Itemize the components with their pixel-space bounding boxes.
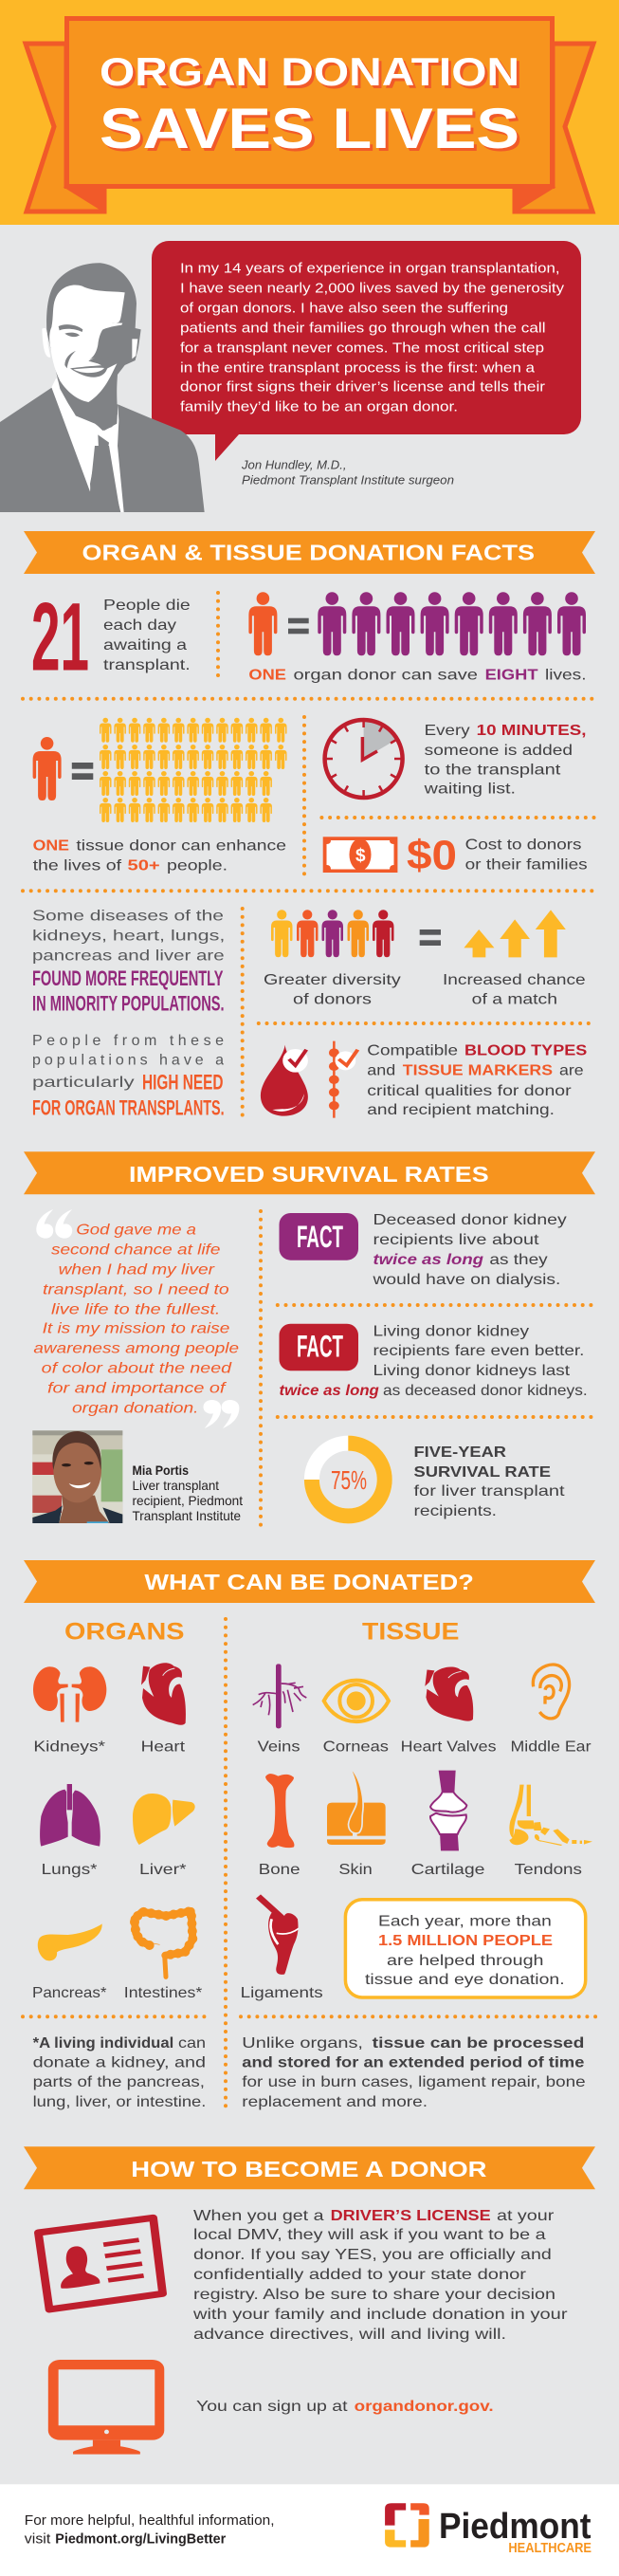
- text: five-year survival rate: [413, 1444, 565, 1519]
- stat: 21 people die each day: each day: [103, 617, 176, 634]
- patient quote: live life to the fullest.: [51, 1302, 220, 1318]
- text: five-year survival rate: SURVIVAL RATE: [413, 1464, 551, 1481]
- text: diseases in minority populations: pancreas and liver are: [32, 948, 225, 965]
- text: living donor footnote: donate a kidney, and: [33, 2054, 206, 2070]
- text: living donor fact: as deceased donor kidneys.: [383, 1383, 588, 1399]
- text: diseases in minority populations: kidneys, heart, lungs,: [32, 929, 225, 945]
- pictogram: one tissue donor equals fifty people: people.: [167, 858, 228, 874]
- text: tissue storage note: Unlike organs,: [242, 2035, 363, 2052]
- footer text: [25, 2512, 275, 2548]
- text: diseases in minority populations: HIGH NEED: [142, 1071, 224, 1095]
- logo: Piedmont Healthcare: [385, 2503, 592, 2556]
- organ and tissue labels: Bone: [259, 1862, 300, 1878]
- icon: tendons foot: [509, 1785, 592, 1846]
- text: driver's license registration: local DMV, they will ask if you want to be a: [193, 2227, 546, 2243]
- logo: Piedmont Healthcare: HEALTHCARE: [508, 2541, 592, 2556]
- callout: 1.5 million people: are helped through: [387, 1953, 544, 1969]
- icon: kidneys: [33, 1666, 106, 1722]
- pictogram: one organ donor equals eight lives: organ donor can save: [294, 668, 478, 684]
- callout: 1.5 million people: Each year, more than: [378, 1914, 552, 1930]
- footer text: Piedmont.org/LivingBetter: [55, 2531, 226, 2548]
- text: driver's license registration: confidentially added to your state donor: [193, 2267, 527, 2283]
- patient quote: of color about the need: [42, 1361, 232, 1377]
- text: living donor fact: Living donor kidney: [373, 1323, 529, 1339]
- organ and tissue labels: [32, 1739, 592, 2001]
- attribution: Jon Hundley: Jon Hundley, M.D.,: [241, 457, 347, 472]
- title: SAVES LIVES: [100, 97, 519, 160]
- text: driver's license registration: [192, 2208, 568, 2343]
- stat: zero dollar cost: or their families: [465, 857, 588, 874]
- stat: zero dollar cost: [407, 833, 588, 879]
- pictogram: increased chance of a match: [443, 910, 586, 1007]
- heading: organs: ORGANS: [64, 1619, 184, 1646]
- pictogram: one organ donor equals eight lives: EIGHT: [485, 668, 538, 684]
- icon: bone: [265, 1774, 294, 1848]
- caption: Mia Portis: [133, 1463, 243, 1523]
- icon: veins: [253, 1664, 306, 1728]
- organ and tissue labels: Veins: [258, 1739, 300, 1756]
- text: blood types and tissue markers: and recipient matching.: [367, 1102, 555, 1118]
- patient quote: awareness among people: [33, 1341, 239, 1357]
- text: tissue storage note: and stored for an extended period of time: [242, 2054, 585, 2070]
- text: deceased donor fact: would have on dialysis.: [372, 1272, 560, 1288]
- text: diseases in minority populations: IN MINORITY POPULATIONS.: [32, 992, 225, 1016]
- speech bubble: surgeon quote: donor first signs their driver’s license and tells their: [180, 379, 545, 395]
- patient quote: [33, 1223, 239, 1417]
- pictogram: greater diversity of donors: [264, 910, 401, 1007]
- icon: ligaments knee: [256, 1894, 299, 1975]
- attribution: Jon Hundley: Piedmont Transplant Institute surgeon: [242, 472, 454, 488]
- text: living donor fact: twice as long: [279, 1383, 379, 1399]
- text: diseases in minority populations: populations have a: [32, 1053, 224, 1069]
- section banner: how to become a donor: [24, 2146, 595, 2189]
- pictogram: increased chance of a match: of a match: [472, 991, 557, 1007]
- text: living donor fact: [279, 1323, 588, 1399]
- text: living donor footnote: lung, liver, or intestine.: [33, 2094, 206, 2110]
- caption: Mia Portis: Liver transplant: [133, 1478, 219, 1493]
- text: diseases in minority populations: FOUND MORE FREQUENTLY: [32, 966, 224, 990]
- stat: 21 people die each day: awaiting a: [103, 637, 187, 653]
- text: driver's license registration: donor. If you say YES, you are officially and: [193, 2247, 552, 2263]
- heading: tissue: TISSUE: [362, 1619, 459, 1646]
- text: every 10 minutes: someone is added: [425, 743, 573, 759]
- footer text: visit: [25, 2531, 51, 2548]
- text: blood types and tissue markers: Compatible: [367, 1043, 458, 1059]
- title: SAVES LIVES: [102, 100, 522, 163]
- pictogram: one organ donor equals eight lives: lives.: [545, 668, 586, 684]
- caption: Mia Portis: recipient, Piedmont: [133, 1493, 243, 1508]
- section banner: improved survival rates: [24, 1151, 595, 1194]
- caption: Mia Portis: Mia Portis: [133, 1463, 189, 1478]
- stat: 21 people die each day: 21: [31, 583, 89, 691]
- icon: closing quote mark: [203, 1400, 239, 1428]
- text: driver's license registration: registry. Also be sure to share your decision: [193, 2287, 555, 2303]
- text: every 10 minutes: to the transplant: [425, 763, 561, 779]
- icon: intestines: [135, 1911, 192, 1977]
- section banner: how to become a donor: HOW TO BECOME A DONOR: [131, 2157, 487, 2181]
- logo: Piedmont Healthcare: Piedmont: [439, 2507, 592, 2547]
- title: ORGAN DONATION: [102, 52, 522, 97]
- icon: pancreas: [38, 1923, 102, 1960]
- stat: 21 people die each day: People die: [103, 598, 191, 614]
- text: every 10 minutes: 10 MINUTES,: [477, 723, 586, 739]
- text: living donor footnote: can: [178, 2035, 206, 2052]
- text: living donor footnote: [33, 2035, 206, 2110]
- text: tissue storage note: tissue can be processed: [373, 2035, 584, 2052]
- text: blood types and tissue markers: and: [367, 1063, 395, 1079]
- attribution: Jon Hundley: [241, 457, 454, 488]
- text: every 10 minutes: waiting list.: [423, 782, 516, 798]
- organ and tissue labels: Ligaments: [241, 1985, 323, 2001]
- speech bubble: surgeon quote: in the entire transplant process is the first: when a: [180, 360, 536, 376]
- organ and tissue labels: Cartilage: [411, 1862, 485, 1878]
- portrait: surgeon illustration: [0, 263, 205, 512]
- patient quote: when I had my liver: [59, 1262, 215, 1279]
- chart: 75 percent donut: 75%: [331, 1465, 367, 1495]
- organ and tissue labels: Heart Valves: [401, 1739, 497, 1756]
- icon: clock: [325, 720, 403, 798]
- badge: fact purple: [279, 1213, 358, 1260]
- organ and tissue labels: Heart: [141, 1739, 186, 1756]
- text: diseases in minority populations: [32, 909, 225, 1120]
- text: sign up online: [196, 2399, 494, 2415]
- section banner: organ and tissue donation facts: ORGAN & TISSUE DONATION FACTS: [82, 541, 535, 565]
- pictogram: one tissue donor equals fifty people: the lives of: [33, 858, 122, 874]
- icon: cartilage joint: [430, 1771, 466, 1850]
- organ and tissue labels: Pancreas*: [32, 1985, 106, 2001]
- organ and tissue labels: Lungs*: [42, 1862, 97, 1878]
- title: ORGAN DONATION: [100, 49, 519, 94]
- badge: fact red: [279, 1324, 358, 1371]
- text: deceased donor fact: Deceased donor kidney: [373, 1212, 567, 1228]
- speech bubble: surgeon quote: for a transplant never comes. The most critical step: [180, 341, 544, 357]
- badge: fact red: FACT: [297, 1330, 343, 1364]
- pictogram: one tissue donor equals fifty people: ONE: [33, 838, 69, 855]
- pictogram: one organ donor equals eight lives: [248, 592, 586, 684]
- text: sign up online: You can sign up at: [196, 2399, 348, 2415]
- organ and tissue labels: Skin: [338, 1862, 373, 1878]
- icon: equals: [420, 929, 441, 946]
- callout: 1.5 million people: 1.5 MILLION PEOPLE: [378, 1933, 553, 1949]
- title: [100, 49, 522, 163]
- text: every 10 minutes: [423, 723, 586, 798]
- icon: liver: [133, 1794, 195, 1845]
- header band: [0, 0, 619, 225]
- organ and tissue labels: Liver*: [139, 1862, 187, 1878]
- stat: zero dollar cost: Cost to donors: [465, 837, 582, 854]
- text: driver's license registration: DRIVER’S LICENSE: [331, 2208, 491, 2224]
- text: blood types and tissue markers: [367, 1043, 588, 1118]
- text: deceased donor fact: twice as long: [373, 1252, 483, 1268]
- text: blood types and tissue markers: are: [559, 1063, 584, 1079]
- text: blood types and tissue markers: TISSUE MARKERS: [403, 1063, 553, 1079]
- icon: heart: [141, 1663, 186, 1725]
- chart: 75 percent donut: [312, 1444, 385, 1516]
- callout: 1.5 million people: [345, 1900, 586, 1997]
- icon: computer monitor: [48, 2360, 164, 2455]
- section banner: what can be donated: [24, 1560, 595, 1603]
- patient quote: second chance at life: [51, 1242, 221, 1259]
- icon: dollar bill: [323, 837, 397, 873]
- icon: opening quote mark: [36, 1209, 72, 1239]
- title ribbon: [26, 19, 593, 212]
- icon: heart valves: [425, 1666, 473, 1721]
- text: tissue storage note: [242, 2035, 586, 2110]
- text: blood types and tissue markers: BLOOD TYPES: [464, 1043, 588, 1059]
- organ and tissue labels: Corneas: [323, 1739, 389, 1756]
- text: living donor footnote: parts of the pancreas,: [33, 2074, 205, 2090]
- speech bubble: surgeon quote: [152, 241, 581, 461]
- pictogram: one tissue donor equals fifty people: [33, 718, 287, 874]
- stat: 21 people die each day: transplant.: [103, 657, 191, 673]
- text: five-year survival rate: for liver transplant: [413, 1483, 565, 1500]
- icon: tissue marker chain with check: [329, 1041, 357, 1118]
- organ and tissue labels: Tendons: [515, 1862, 582, 1878]
- patient quote: transplant, so I need to: [43, 1282, 229, 1298]
- organ and tissue labels: Middle Ear: [510, 1739, 592, 1756]
- text: living donor fact: recipients fare even better.: [373, 1343, 584, 1359]
- text: driver's license registration: advance directives, will and living will.: [193, 2327, 506, 2343]
- organ and tissue labels: Intestines*: [124, 1985, 202, 2001]
- icon: blood drop with check: [261, 1045, 308, 1116]
- text: sign up online: organdonor.gov.: [355, 2399, 494, 2415]
- text: five-year survival rate: FIVE-YEAR: [413, 1444, 507, 1461]
- callout: 1.5 million people: tissue and eye donation.: [365, 1972, 565, 1988]
- text: driver's license registration: at your: [497, 2208, 555, 2224]
- speech bubble: surgeon quote: patients and their families go through when the call: [180, 321, 546, 336]
- icon: corneas eye: [324, 1681, 389, 1721]
- speech bubble: surgeon quote: of organ donors. I have also seen the suffering: [180, 302, 508, 317]
- icon: middle ear: [533, 1665, 570, 1719]
- pictogram: one organ donor equals eight lives: ONE: [248, 668, 286, 684]
- icon: lungs: [40, 1784, 100, 1847]
- text: driver's license registration: When you get a: [193, 2208, 324, 2224]
- badge: fact purple: FACT: [297, 1220, 343, 1254]
- speech bubble: surgeon quote: family they’d like to be an organ donor.: [180, 400, 458, 415]
- photo: Mia Portis: [32, 1430, 122, 1523]
- pictogram: greater diversity of donors: Greater diversity: [264, 972, 401, 988]
- pictogram: one tissue donor equals fifty people: 50+: [127, 858, 160, 874]
- section banner: what can be donated: WHAT CAN BE DONATED?: [144, 1570, 474, 1594]
- text: living donor footnote: *A living individual: [33, 2035, 173, 2052]
- text: tissue storage note: replacement and more.: [242, 2094, 428, 2110]
- patient quote: for and importance of: [47, 1381, 227, 1397]
- text: tissue storage note: for use in burn cases, ligament repair, bone: [242, 2074, 586, 2090]
- text: deceased donor fact: recipients live about: [373, 1232, 539, 1248]
- text: five-year survival rate: recipients.: [413, 1503, 497, 1519]
- text: blood types and tissue markers: critical qualities for donor: [367, 1083, 572, 1099]
- text: deceased donor fact: [372, 1212, 567, 1288]
- organ and tissue labels: Kidneys*: [33, 1739, 105, 1756]
- text: diseases in minority populations: Some diseases of the: [32, 909, 224, 925]
- speech bubble: surgeon quote: I have seen nearly 2,000 lives saved by the generosity: [180, 281, 565, 296]
- caption: Mia Portis: Transplant Institute: [133, 1508, 241, 1523]
- stat: zero dollar cost: $0: [407, 833, 457, 879]
- pictogram: greater diversity of donors: of donors: [293, 991, 372, 1007]
- icon: skin and hair follicle: [327, 1771, 386, 1845]
- text: living donor fact: Living donor kidneys last: [373, 1363, 571, 1379]
- text: diseases in minority populations: FOR ORGAN TRANSPLANTS.: [32, 1096, 225, 1120]
- text: every 10 minutes: Every: [425, 723, 470, 739]
- pictogram: increased chance of a match: Increased chance: [443, 972, 586, 988]
- section banner: organ and tissue donation facts: [24, 531, 595, 574]
- speech bubble: surgeon quote: In my 14 years of experience in organ transplantation,: [180, 262, 559, 277]
- icon: dollar bill: $: [355, 846, 366, 866]
- footer text: For more helpful, healthful information,: [25, 2512, 275, 2529]
- text: driver's license registration: with your family and include donation in your: [192, 2307, 568, 2323]
- icon: driver's license: [38, 2217, 163, 2309]
- patient quote: God gave me a: [76, 1223, 196, 1239]
- text: diseases in minority populations: People from these: [32, 1033, 224, 1049]
- patient quote: It is my mission to raise: [43, 1321, 230, 1337]
- pictogram: one tissue donor equals fifty people: tissue donor can enhance: [76, 838, 286, 855]
- patient quote: organ donation.: [72, 1401, 199, 1417]
- text: deceased donor fact: as they: [489, 1252, 548, 1268]
- text: diseases in minority populations: particularly: [32, 1075, 135, 1091]
- section banner: improved survival rates: IMPROVED SURVIVAL RATES: [129, 1162, 489, 1187]
- stat: 21 people die each day: [31, 583, 191, 691]
- footer band: [0, 2484, 619, 2576]
